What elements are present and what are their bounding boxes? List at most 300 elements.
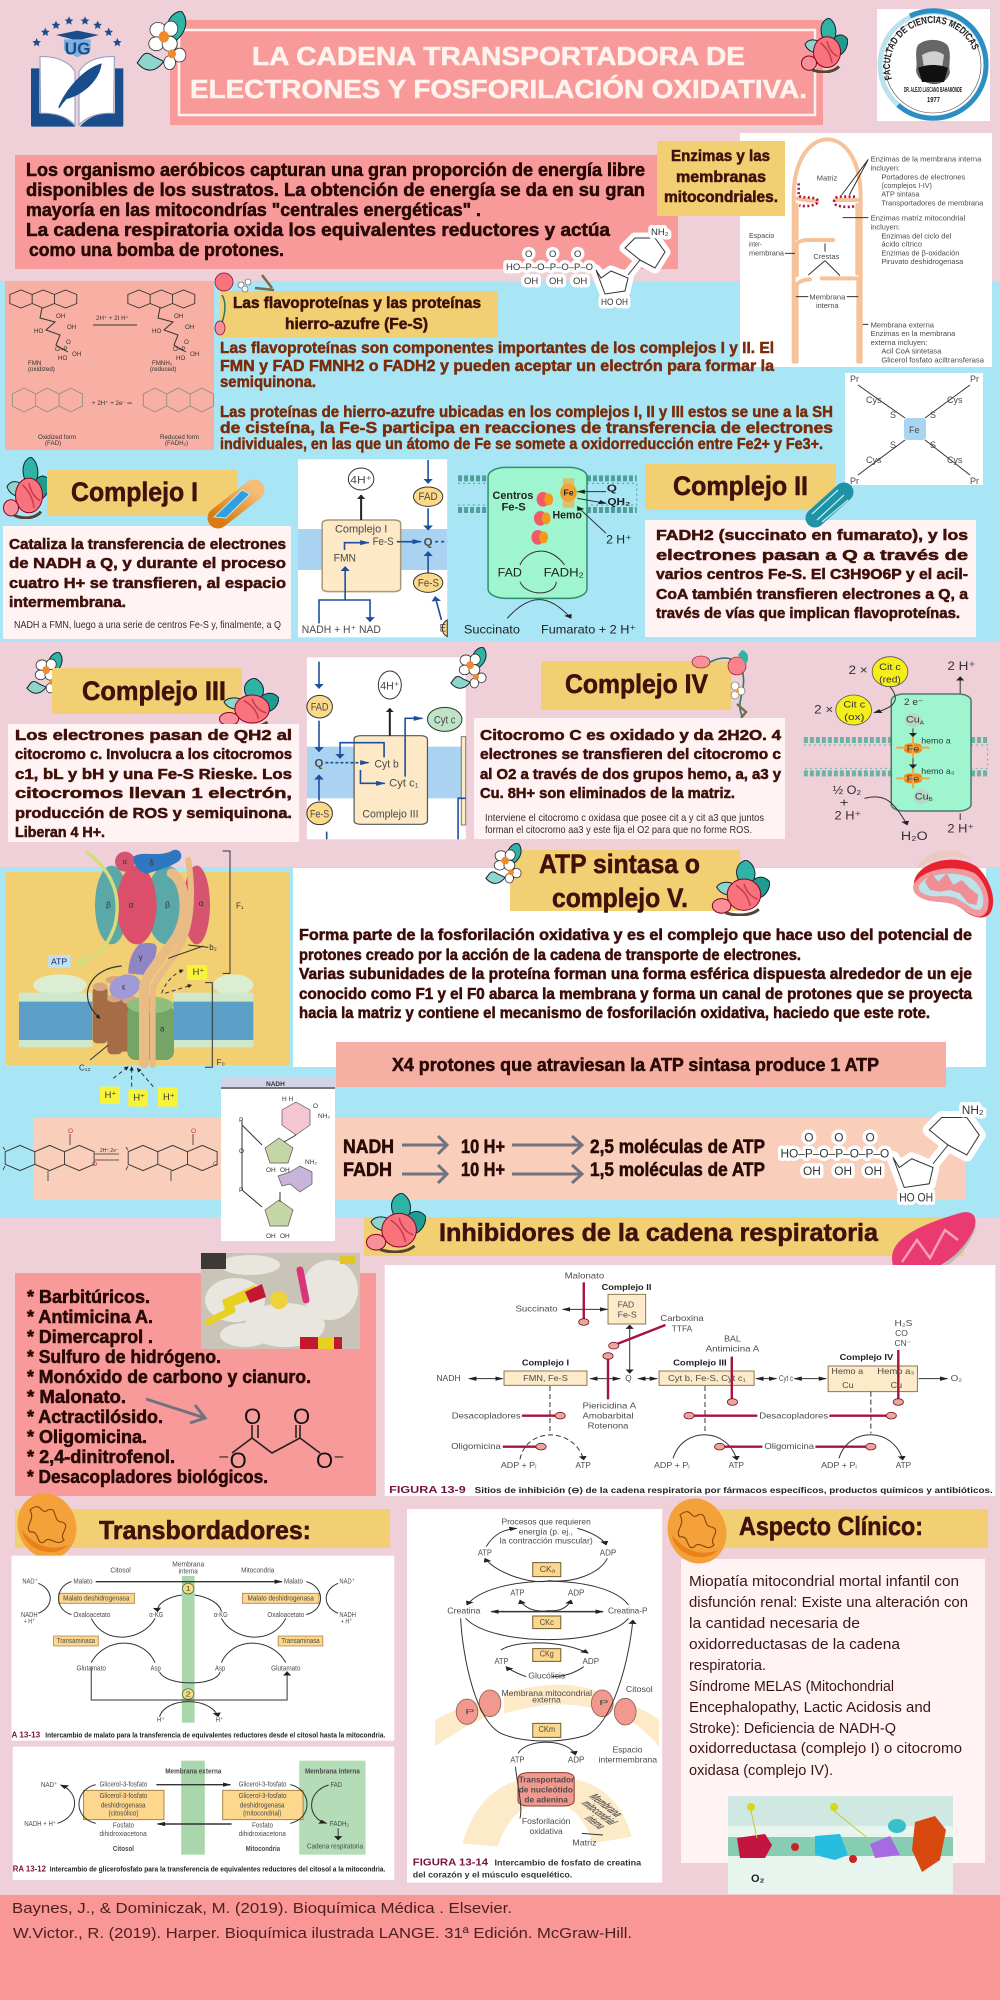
diagram: Fe-S centre: Pr: [970, 374, 979, 384]
diagram: mitochondrial membranes and enzymes: Portadores de electrones: [881, 172, 965, 181]
figure 13-14: creatine phosphate shuttle: interna: [581, 1814, 610, 1830]
panel: FMN and FAD structures: HO: [176, 355, 185, 362]
figure 13-9: inhibition sites: Oligomicina: [764, 1442, 814, 1451]
icon: pink mitochondrion: [892, 1212, 976, 1277]
diagram: Fe-S centre: Cys: [866, 455, 882, 465]
figure 13-12: glycerophosphate shuttle: (mitocondrial): [243, 1810, 282, 1818]
figure 13-13: malate shuttle: H⁺: [157, 1716, 165, 1724]
diagram: ATP synthase: β: [106, 900, 111, 910]
icon: flower on ATP heading: [486, 843, 521, 883]
callout: 4 protons produce 1 ATP: X4 protones que atraviesan la ATP sintasa produce 1 ATP: [392, 1055, 879, 1075]
panel: Aspecto Clínico text: Stroke): Deficiencia de NADH-Q: [689, 1720, 896, 1737]
figure 13-12: glycerophosphate shuttle: Intercambio de glicerofosfato para la transferencia de equivalentes reductores del citosol a la mitocondria.: [50, 1866, 385, 1874]
figure 13-9: inhibition sites: Cyt b, Fe-S, Cyt c₁: [668, 1374, 746, 1383]
figure 13-13: malate shuttle: A 13-13: [11, 1729, 40, 1739]
figure 13-12: glycerophosphate shuttle: Fosfato: [113, 1821, 134, 1829]
heading: Complejo II: Complejo II: [673, 471, 808, 501]
diagram: ATP synthase: [19, 850, 253, 1107]
icon: ATP molecule bottom: O: [804, 1130, 813, 1144]
panel: Aspecto Clínico text: disfunción renal: Existe una alteración con: [689, 1594, 968, 1611]
icon: rose Complejo III: [219, 678, 279, 727]
figure 13-13: malate shuttle: Malato deshidrogenasa: [63, 1594, 130, 1602]
panel: FMN and FAD structures: HO: [58, 355, 67, 362]
diagram: Fe-S centre: Fe: [909, 425, 920, 435]
figure 13-9: inhibition sites: ADP + Pᵢ: [501, 1461, 537, 1470]
panel: inhibitors list: * Malonato.: [27, 1387, 126, 1407]
figure 13-14: creatine phosphate shuttle: Intercambio de fosfato de creatina: [494, 1858, 641, 1868]
diagram: flavin reduction: O: [191, 1128, 196, 1135]
panel: inhibitors list: * Sulfuro de hidrógeno.: [27, 1347, 221, 1367]
icon: flower on Complejo III diagram: [451, 647, 486, 688]
diagram: Complejo IV: 2 ×: [814, 702, 833, 716]
diagram: Complejo IV: A: [920, 720, 924, 726]
diagram: Complejo II: FAD: [498, 566, 522, 579]
figure 13-14: creatine phosphate shuttle: ATP: [494, 1657, 508, 1666]
diagram: NADH molecule: H H: [282, 1096, 294, 1103]
panel: FMN and FAD structures: OH: [67, 324, 76, 331]
figure 13-9: inhibition sites: Rotenona: [588, 1421, 629, 1431]
figure 13-13: malate shuttle: Oxaloacetato: [73, 1611, 110, 1619]
diagram: NADH molecule: NADH: [266, 1081, 285, 1088]
heading: ATP sintasa o complejo V: ATP sintasa o: [539, 849, 700, 879]
text: NADH and FADH ATP yield with arrows: 10 H+: [461, 1137, 505, 1158]
figure 13-12: glycerophosphate shuttle: dihidroxiacetona: [239, 1830, 286, 1838]
icon: ATP molecule top: O: [525, 249, 532, 260]
panel: Aspecto Clínico text: respiratoria.: [689, 1657, 766, 1674]
background: blue band upper: [0, 281, 1000, 641]
icon: ATP molecule top: OH: [573, 276, 587, 287]
figure 13-14: creatine phosphate shuttle: Creatina: [447, 1606, 481, 1616]
figure 13-14: creatine phosphate shuttle: ATP: [478, 1548, 492, 1557]
diagram: Complejo I: 4H⁺: [350, 474, 372, 486]
diagram: mitochondrial membranes and enzymes: incluyen:: [871, 223, 900, 232]
footer: references: [0, 1895, 1000, 2000]
heading: Complejo I: [47, 470, 237, 516]
panel: ATP yield: [33, 1118, 965, 1200]
diagram: mitochondrial membranes and enzymes: ácido cítrico: [881, 240, 922, 249]
panel: FMN and FAD structures: OH: [190, 351, 199, 358]
icon: malonate molecule: O: [244, 1404, 261, 1429]
diagram: Complejo II: Hemo: [553, 509, 582, 521]
footer: references: W.Victor., R. (2019). Harper. Bioquímica ilustrada LANGE. 31ª Edición. McGraw-Hill.: [13, 1925, 632, 1942]
figure 13-14: creatine phosphate shuttle: energía (p. ej.,: [519, 1527, 573, 1536]
figure 13-14: creatine phosphate shuttle: intermembrana: [598, 1755, 657, 1765]
panel: Aspecto Clínico text: [681, 1559, 985, 1863]
diagram: ATP synthase: a: [160, 1025, 165, 1034]
diagram: Fe-S centre: Pr: [850, 476, 859, 486]
heading: Complejo IV: Complejo IV: [565, 669, 708, 699]
arrow: to malonate: [146, 1399, 205, 1423]
figure 13-9: inhibition sites: Complejo IV: [840, 1353, 894, 1362]
icon: ATP molecule bottom: NH₂: [962, 1103, 984, 1117]
figure 13-14: creatine phosphate shuttle: Membrana: [585, 1793, 627, 1818]
heading: Inhibidores de la cadena respiratoria: Inhibidores de la cadena respiratoria: [439, 1219, 879, 1247]
diagram: NADH molecule: O: [239, 1148, 244, 1155]
icon: ATP molecule top: OH: [524, 276, 538, 287]
figure 13-13: malate shuttle: 2: [186, 1690, 191, 1698]
diagram: ATP synthase: α: [199, 898, 204, 908]
panel: Complejo IV text: Citocromo C es oxidado y da 2H2O. 4: [480, 727, 782, 744]
figure 13-14: creatine phosphate shuttle: ATP: [510, 1755, 524, 1765]
diagram: Complejo I: FMN: [334, 552, 356, 564]
diagram: Complejo II: Fe-S: [501, 501, 526, 513]
figure 13-12: glycerophosphate shuttle: NAD⁺: [41, 1781, 57, 1789]
diagram: Fe-S centre: Cys: [866, 395, 882, 405]
figure 13-12: glycerophosphate shuttle: Mitocondria: [246, 1845, 280, 1853]
heading: Complejo I: Complejo I: [71, 477, 198, 507]
panel: Complejo IV text: Interviene el citocromo c oxidasa que posee cit a y cit a3 que juntos: [485, 812, 764, 824]
diagram: Complejo II: QH₂: [607, 496, 630, 508]
figure 13-9: inhibition sites: Cyt c: [779, 1374, 793, 1383]
logo: Facultad de Ciencias Médicas seal: [877, 8, 990, 121]
figure 13-13: malate shuttle: α-KG: [214, 1611, 228, 1619]
title banner: ELECTRONES Y FOSFORILACIÓN OXIDATIVA.: [190, 74, 807, 104]
diagram: Complejo IV: Cu: [906, 715, 929, 725]
logo: university: UG: [65, 38, 91, 58]
heading: flavoproteins and iron-sulfur proteins: hierro-azufre (Fe-S): [285, 316, 428, 333]
figure 13-9: inhibition sites: Oligomicina: [451, 1442, 501, 1451]
diagram: ATP synthase: α: [129, 900, 134, 910]
heading: Inhibidores de la cadena respiratoria: [364, 1217, 964, 1256]
figure 13-13: malate shuttle: Oxaloacetato: [267, 1611, 304, 1619]
panel: FMN and FAD structures: Oxidized form: [38, 434, 76, 441]
figure 13-13: malate shuttle: NAD⁺: [339, 1578, 355, 1586]
diagram: Complejo III: FAD: [311, 701, 329, 713]
text: flavoproteins and Fe-S proteins: individuales, en las que un átomo de Fe se somete a oxidorreducción entre Fe2+ y Fe3+.: [220, 436, 823, 453]
image: photosystem electron chain: [728, 1796, 953, 1894]
diagram: ATP synthase: ATP: [51, 956, 67, 966]
icon: orange mitochondrion left: [8, 1485, 86, 1567]
diagram: Fe-S centre: Pr: [850, 374, 859, 384]
icon: flower branch Complejo IV: [692, 650, 748, 718]
figure 13-9: inhibition sites: Antimicina A: [706, 1344, 760, 1354]
panel: FMN and FAD structures: O=P: [55, 346, 68, 353]
diagram: mitochondrial membranes and enzymes: Transportadores de membrana: [881, 198, 984, 207]
diagram: Complejo II: [458, 467, 637, 636]
figure 13-14: creatine phosphate shuttle: oxidativa: [530, 1827, 563, 1836]
figure 13-9: inhibition sites: Cu: [891, 1381, 902, 1390]
figure 13-12: glycerophosphate shuttle: Glicerol-3-fosfato: [239, 1792, 286, 1800]
icon: flower Complejo III: [27, 652, 62, 693]
diagram: Complejo II: 2 H⁺: [606, 532, 632, 546]
diagram: ATP synthase: β: [165, 900, 170, 910]
diagram: Fe-S centre: S: [930, 440, 936, 450]
diagram: Complejo I: E: [440, 622, 446, 634]
diagram: Fe-S centre: S: [930, 410, 936, 420]
diagram: Complejo IV: Cit c: [843, 699, 865, 710]
diagram: ATP synthase: b₂: [209, 943, 217, 952]
figure 13-12: glycerophosphate shuttle: Glicerol-3-fosfato: [100, 1781, 147, 1789]
figure 13-14: creatine phosphate shuttle: Transportador: [519, 1775, 574, 1784]
text: ATP synthase description: [299, 927, 972, 1022]
figure 13-13: malate shuttle: + H⁺: [24, 1618, 35, 1626]
logo: university: [31, 16, 123, 127]
figure 13-9: inhibition sites: CO: [895, 1329, 908, 1338]
figure 13-12: glycerophosphate shuttle: RA 13-12: [13, 1864, 46, 1874]
diagram: mitochondrial membranes and enzymes: (complejos I-IV): [881, 181, 932, 190]
figure 13-13: malate shuttle: NAD⁺: [22, 1578, 38, 1586]
figure 13-9: inhibition sites: ATP: [896, 1461, 911, 1470]
panel: FMN and FAD structures: O: [184, 339, 189, 346]
panel: Complejo III text: citocromo c. Involucra a los citocromos: [15, 746, 292, 763]
figure 13-14: creatine phosphate shuttle: Espacio: [612, 1745, 643, 1755]
heading: Complejo IV: [541, 661, 731, 710]
text: ATP synthase description: Varias subunidades de la proteína forman una forma esférica dispuesta alrededor de un eje: [299, 966, 972, 983]
diagram: Complejo IV: Cit c: [879, 662, 901, 673]
diagram: NADH molecule: OH: [266, 1167, 276, 1174]
diagram: NADH molecule: OH: [266, 1233, 276, 1240]
text: flavoproteins and Fe-S proteins: de cisteína, la Fe-S participa en reacciones de transferencia de electrones: [220, 420, 833, 437]
figure 13-9: inhibition sites: Cu: [842, 1381, 854, 1390]
image: photosystem electron chain: O₂: [751, 1873, 765, 1885]
diagram: NADH molecule: OH: [280, 1233, 290, 1240]
panel: Complejo III text: producción de ROS y semiquinona.: [15, 805, 292, 822]
diagram: ATP synthase: H⁺: [163, 1092, 175, 1102]
diagram: flavin reduction: 2H⁺,2e⁻: [100, 1148, 119, 1154]
diagram: NADH molecule: [221, 1077, 335, 1241]
figure 13-13: malate shuttle: Glutamato: [271, 1664, 300, 1672]
text: NADH and FADH ATP yield with arrows: NADH: [343, 1137, 394, 1158]
figure 13-14: creatine phosphate shuttle: Procesos que requieren: [501, 1517, 591, 1526]
figure 13-9: inhibition sites: ADP + Pᵢ: [654, 1461, 690, 1470]
heading: Transbordadores: [15, 1509, 390, 1548]
diagram: Complejo II: FADH₂: [544, 566, 584, 579]
figure 13-14: creatine phosphate shuttle: ADP: [568, 1588, 584, 1598]
panel: inhibitors list: * Actractilósido.: [27, 1407, 163, 1427]
figure 13-9: inhibition sites: NADH: [436, 1374, 461, 1383]
figure 13-9: inhibition sites: Desacopladores: [759, 1411, 828, 1420]
panel: FMN and FAD structures: O=P: [173, 346, 186, 353]
panel: Aspecto Clínico text: oxidorreductasas de la cadena: [689, 1636, 901, 1653]
diagram: Complejo II: Fumarato + 2 H⁺: [541, 622, 636, 636]
figure 13-14: creatine phosphate shuttle: del corazón y el músculo esquelético.: [413, 1870, 572, 1880]
diagram: Complejo IV: hemo a: [921, 736, 951, 745]
panel: introduction: mayoría en las mitocondrías "centrales energéticas" .: [26, 200, 481, 220]
panel: FMN and FAD structures: 2H⁺ + 2I H⁺: [96, 315, 129, 322]
figure 13-9: inhibition sites: Complejo II: [602, 1283, 651, 1292]
diagram: Complejo I: Q: [424, 536, 433, 548]
figure 13-9: inhibition sites: ATP: [729, 1461, 744, 1470]
diagram: Complejo IV: 2 ×: [849, 663, 868, 677]
figure 13-14: creatine phosphate shuttle: la contracción muscular): [500, 1536, 593, 1545]
text: ATP synthase description: hacia la matriz y contiene el mecanismo de fosforilación oxidativa, haciedo que este rote.: [299, 1005, 930, 1022]
icon: ATP molecule top: OH: [549, 276, 563, 287]
heading: flavoproteins and iron-sulfur proteins: Las flavoproteínas y las proteínas: [233, 295, 481, 312]
diagram: Complejo II: Fe: [563, 488, 574, 498]
icon: orange mitochondrion right: [658, 1490, 736, 1572]
figure 13-9: inhibition sites: Succinato: [516, 1304, 558, 1314]
figure 13-12: glycerophosphate shuttle: deshidrogenasa: [240, 1801, 285, 1809]
diagram: Complejo III: Cyt b: [375, 758, 399, 770]
icon: ATP molecule bottom: O: [866, 1130, 875, 1144]
text: ATP synthase description: protones creado por la acción de la cadena de transporte de electrones.: [299, 947, 801, 964]
figure 13-9: inhibition sites: BAL: [724, 1334, 741, 1344]
icon: malonate molecule: [218, 1404, 345, 1473]
figure 13-13: malate shuttle: Glutamato: [77, 1664, 106, 1672]
figure 13-13: malate shuttle: Intercambio de malato para la transferencia de equivalentes reductores desde el citosol hasta la mitocondria.: [45, 1731, 385, 1739]
panel: FMN and FAD structures: + 2H⁺ + 2e⁻ ═: [92, 400, 132, 407]
icon: mitochondrion Complejo II: [812, 490, 848, 522]
figure 13-9: inhibition sites: Piericidina A: [582, 1401, 637, 1410]
figure 13-14: creatine phosphate shuttle: CKm: [538, 1725, 555, 1734]
diagram: Complejo IV: H₂O: [901, 829, 928, 843]
icon: ATP molecule top: NH₂: [651, 227, 669, 238]
heading: Enzimas y las membranas mitocondriales: Enzimas y las: [671, 148, 770, 165]
figure 13-9: inhibition sites: Hemo a: [831, 1367, 863, 1376]
figure 13-9: inhibition sites: FMN, Fe-S: [523, 1374, 568, 1383]
panel: Complejo II text: través de vías que implican flavoproteínas.: [656, 605, 960, 622]
icon: ATP molecule top: HO–P–O–P–O–P–O: [506, 262, 593, 273]
logo: Facultad de Ciencias Médicas seal: FACULTAD DE CIENCIAS MEDICAS: [883, 16, 979, 80]
diagram: ATP synthase: F₀: [217, 1058, 225, 1067]
icon: ATP molecule bottom: O: [834, 1130, 843, 1144]
figure 13-13: malate shuttle: α-KG: [149, 1611, 163, 1619]
diagram: mitochondrial membranes and enzymes: [740, 133, 992, 367]
diagram: Complejo II: Centros: [493, 490, 533, 502]
diagram: ATP synthase: F₁: [236, 901, 244, 910]
text: flavoproteins and Fe-S proteins: Las proteínas de hierro-azufre ubicadas en los complejos I, II y III estos se une a la SH: [220, 404, 833, 421]
panel: FMN and FAD structures: FMNH₂: [152, 360, 173, 367]
icon: ATP molecule bottom: OH: [834, 1164, 852, 1178]
figure 13-13: malate shuttle: Malato: [284, 1578, 303, 1586]
diagram: Complejo IV: Fe: [907, 744, 919, 754]
figure 13-9: inhibition sites: Carboxina: [660, 1314, 704, 1323]
text: NADH and FADH ATP yield with arrows: 2,5 moléculas de ATP: [590, 1137, 765, 1158]
diagram: NADH molecule: NH₂: [318, 1113, 330, 1120]
figure 13-14: creatine phosphate shuttle: Matriz: [572, 1838, 597, 1848]
diagram: mitochondrial membranes and enzymes: Enzimas de β-oxidación: [881, 249, 959, 258]
heading: Enzimas y las membranas mitocondriales: membranas: [676, 169, 766, 186]
figure 13-13: malate shuttle: H⁺: [216, 1716, 223, 1724]
icon: ATP molecule bottom: HO OH: [899, 1190, 933, 1204]
diagram: Complejo III: Cyt c: [434, 714, 456, 726]
figure 13-14: creatine phosphate shuttle: Fosforilación: [522, 1817, 570, 1826]
icon: malonate molecule: O: [293, 1404, 310, 1429]
panel: Aspecto Clínico text: Encephalopathy, Lactic Acidosis and: [689, 1699, 931, 1716]
diagram: Fe-S centre: S: [890, 440, 896, 450]
figure 13-12: glycerophosphate shuttle: Fosfato: [252, 1821, 273, 1829]
figure 13-13: malate shuttle: Mitocondria: [241, 1567, 275, 1575]
figure 13-14: creatine phosphate shuttle: ATP: [510, 1588, 524, 1598]
icon: ATP molecule bottom: OH: [864, 1164, 882, 1178]
diagram: Fe-S centre: S: [890, 410, 896, 420]
figure 13-14: creatine phosphate shuttle: Glucólisis: [528, 1671, 565, 1681]
diagram: ATP synthase: H⁺: [105, 1090, 116, 1100]
heading: Enzimas y las membranas mitocondriales: [657, 141, 785, 216]
panel: Complejo III text: Liberan 4 H+.: [15, 824, 105, 841]
heading: Transbordadores: Transbordadores:: [99, 1515, 311, 1545]
panel: Aspecto Clínico text: oxidasa (complejo IV).: [689, 1762, 833, 1779]
panel: FMN and FAD structures: OH: [72, 351, 81, 358]
figure 13-13: malate shuttle: [11, 1556, 394, 1741]
diagram: Complejo IV: Cu: [915, 791, 938, 802]
panel: Complejo IV text: forman el citocromo aa3 y este fija el O2 para que no forme ROS.: [485, 824, 752, 836]
figure 13-9: inhibition sites: ATP: [575, 1461, 591, 1470]
heading: Complejo III: Complejo III: [82, 676, 226, 706]
figure 13-14: creatine phosphate shuttle: de adenina: [524, 1795, 568, 1804]
panel: Complejo III text: Los electrones pasan de QH2 al: [15, 727, 292, 744]
icon: ATP molecule bottom: HO–P–O–P–O–P–O: [780, 1147, 889, 1161]
heading: Complejo II: [645, 464, 836, 510]
figure 13-14: creatine phosphate shuttle: P: [599, 1699, 608, 1707]
figure 13-9: inhibition sites: [385, 1265, 995, 1496]
title banner: [170, 20, 823, 125]
figure 13-14: creatine phosphate shuttle: [407, 1509, 662, 1883]
panel: Complejo IV text: [474, 718, 785, 839]
diagram: Complejo III: Complejo III: [362, 808, 419, 820]
figure 13-14: creatine phosphate shuttle: CKₐ: [540, 1565, 555, 1574]
diagram: flavin reduction: [3, 1128, 218, 1181]
diagram: mitochondrial membranes and enzymes: Acil CoA sintetasa: [881, 347, 942, 356]
panel: Complejo I text: cuatro H+ se transfieren, al espacio: [9, 575, 286, 592]
icon: ATP molecule bottom: OH: [803, 1164, 821, 1178]
panel: Complejo I text: de NADH a Q, y durante el proceso: [9, 555, 286, 572]
figure 13-13: malate shuttle: Transaminasa: [57, 1637, 95, 1645]
diagram: Fe-S centre: Cys: [947, 455, 963, 465]
panel: Complejo III text: [8, 724, 299, 842]
diagram: flavin reduction: O: [68, 1128, 73, 1135]
diagram: ATP synthase: H⁺: [133, 1093, 145, 1103]
diagram: Complejo I: Complejo I: [335, 523, 387, 535]
figure 13-12: glycerophosphate shuttle: Glicerol-3-fosfato: [100, 1792, 147, 1800]
diagram: Complejo I: Fe-S: [418, 577, 439, 589]
figure 13-13: malate shuttle: Malato: [73, 1578, 93, 1586]
figure 13-9: inhibition sites: Hemo a₃: [877, 1367, 914, 1376]
icon: ATP molecule top: [506, 227, 669, 308]
figure 13-9: inhibition sites: FIGURA 13-9: [389, 1484, 466, 1496]
figure 13-12: glycerophosphate shuttle: FADH₂: [330, 1820, 349, 1828]
icon: rose Complejo I: [4, 457, 50, 518]
panel: Complejo III text: citocromos llevan 1 electrón,: [15, 785, 292, 802]
figure 13-13: malate shuttle: Malato deshidrogenasa: [248, 1594, 314, 1602]
diagram: Complejo IV: B: [929, 796, 933, 802]
figure 13-12: glycerophosphate shuttle: Glicerol-3-fosfato: [239, 1781, 286, 1789]
diagram: Complejo IV: +: [840, 796, 849, 809]
diagram: ATP synthase: ε: [122, 982, 126, 991]
diagram: Complejo III: Q: [315, 757, 323, 769]
diagram: Complejo II: Succinato: [464, 622, 520, 636]
panel: FMN and FAD structures: OH: [174, 313, 183, 320]
figure 13-13: malate shuttle: 1: [186, 1585, 191, 1593]
diagram: mitochondrial membranes and enzymes: Enzimas en la membrana: [871, 329, 956, 338]
panel: FMN and FAD structures: (FAD): [45, 440, 61, 447]
diagram: Complejo I: Fe-S: [373, 535, 394, 548]
diagram: Complejo IV: 2 e⁻: [904, 697, 923, 708]
figure 13-12: glycerophosphate shuttle: Membrana interna: [305, 1768, 360, 1776]
figure 13-12: glycerophosphate shuttle: FAD: [330, 1781, 342, 1789]
figure 13-14: creatine phosphate shuttle: Creatina-P: [608, 1606, 648, 1616]
figure 13-9: inhibition sites: Desacopladores: [452, 1411, 521, 1420]
icon: mitochondrion Complejo I: [214, 490, 254, 518]
panel: Aspecto Clínico text: Miopatía mitocondrial mortal infantil con: [689, 1573, 959, 1590]
text: NADH and FADH ATP yield with arrows: 10 H+: [461, 1160, 505, 1181]
panel: FMN and FAD structures: O: [66, 339, 71, 346]
diagram: mitochondrial membranes and enzymes: Crestas: [813, 252, 839, 261]
panel: introduction: disponibles de los sustratos. La obtención de energía se da en su gran: [26, 180, 645, 200]
panel: Complejo I text: NADH a FMN, luego a una serie de centros Fe-S y, finalmente, a Q: [14, 619, 281, 631]
diagram: Complejo III: Cyt c₁: [389, 777, 419, 789]
icon: ATP molecule bottom: [780, 1103, 984, 1204]
panel: Complejo IV text: Cu. 8H+ son eliminados de la matriz.: [480, 785, 735, 802]
figure 13-12: glycerophosphate shuttle: Cadena respiratoria: [307, 1842, 363, 1850]
icon: red mitochondrion: [913, 850, 993, 917]
figure 13-13: malate shuttle: NADH: [21, 1611, 38, 1619]
heading: Aspecto Clínico: Aspecto Clínico:: [739, 1511, 923, 1541]
diagram: Fe-S centre: Pr: [970, 476, 979, 486]
panel: introduction: La cadena respiratoria oxida los equivalentes reductores y actúa: [26, 220, 611, 240]
diagram: Complejo IV: (red): [879, 674, 901, 685]
diagram: Complejo III: 4H⁺: [380, 680, 399, 692]
